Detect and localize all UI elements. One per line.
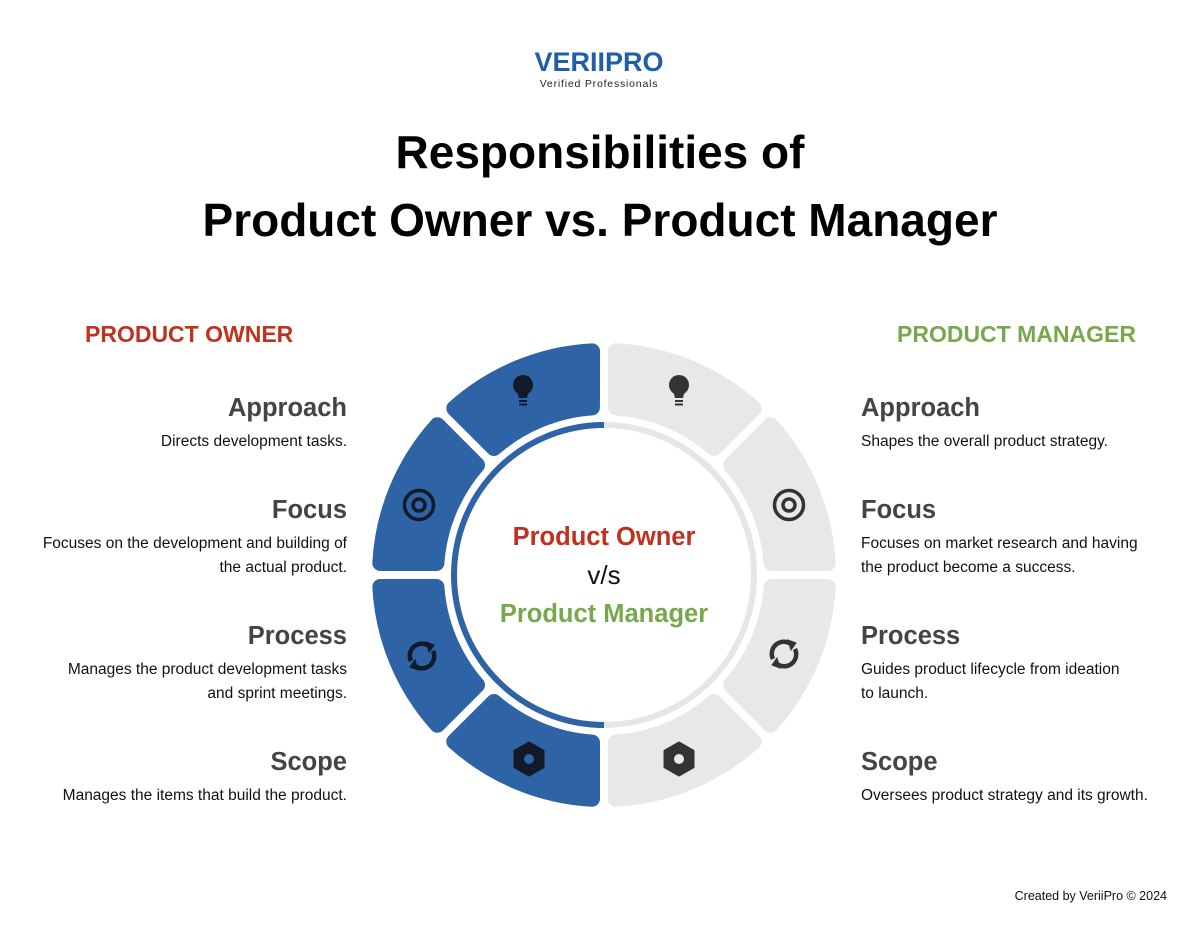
PO process: Process <box>248 622 347 650</box>
center text: Product Manager <box>500 600 708 628</box>
PM scope <box>861 748 1148 804</box>
PO focus: the actual product. <box>219 559 347 576</box>
PO process: Manages the product development tasks <box>68 661 347 678</box>
PM focus: Focus <box>861 496 936 524</box>
PM approach <box>861 394 1108 450</box>
PM focus: the product become a success. <box>861 559 1076 576</box>
footer credit: Created by VeriiPro © 2024 <box>1015 889 1167 903</box>
PM approach: Shapes the overall product strategy. <box>861 433 1108 450</box>
center text: Product Owner <box>513 523 695 551</box>
segments gray <box>588 351 868 839</box>
icons: target <box>404 490 804 520</box>
heading: product manager: PRODUCT MANAGER <box>897 321 1136 347</box>
PO focus: Focuses on the development and building of <box>43 535 347 552</box>
PO focus <box>43 496 347 576</box>
PO process <box>68 622 347 702</box>
PO scope: Scope <box>270 748 347 776</box>
PO scope <box>63 748 347 804</box>
PM process: Guides product lifecycle from ideation <box>861 661 1119 678</box>
center text: v/s <box>587 560 621 590</box>
title: Responsibilities of <box>396 126 804 178</box>
PM approach: Approach <box>861 394 980 422</box>
heading: product owner: PRODUCT OWNER <box>85 321 293 347</box>
logo: Verified Professionals <box>540 78 658 90</box>
PM process: to launch. <box>861 685 928 702</box>
segments blue <box>340 311 620 799</box>
PM process: Process <box>861 622 960 650</box>
icons: sync <box>410 640 796 670</box>
title <box>203 126 997 246</box>
PM process <box>861 622 1119 702</box>
inner ring <box>454 425 754 725</box>
PO scope: Manages the items that build the product. <box>63 787 347 804</box>
logo <box>534 47 664 90</box>
title: Product Owner vs. Product Manager <box>203 194 997 246</box>
PM focus: Focuses on market research and having <box>861 535 1138 552</box>
PM scope: Scope <box>861 748 938 776</box>
PO focus: Focus <box>272 496 347 524</box>
icons: bulb <box>513 375 689 406</box>
PO process: and sprint meetings. <box>207 685 347 702</box>
PM focus <box>861 496 1138 576</box>
PO approach: Approach <box>228 394 347 422</box>
PM scope: Oversees product strategy and its growth. <box>861 787 1148 804</box>
PO approach <box>161 394 347 450</box>
center text <box>500 523 708 628</box>
icons: hex nut <box>515 743 693 775</box>
logo: VERIIPRO <box>534 47 664 77</box>
PO approach: Directs development tasks. <box>161 433 347 450</box>
